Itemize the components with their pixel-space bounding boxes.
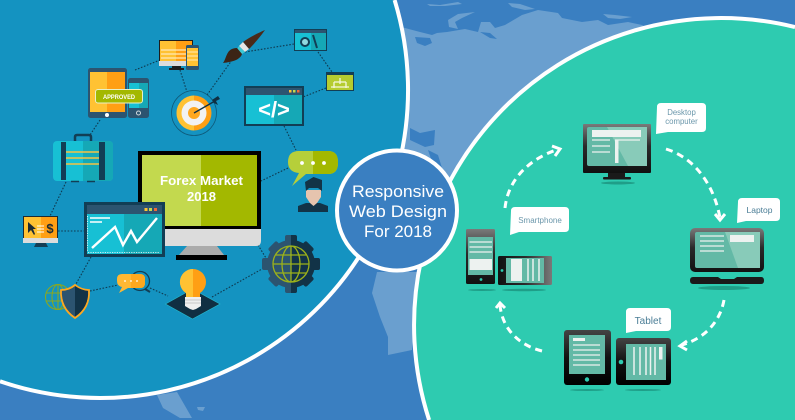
- icon: responsive screens: [159, 40, 199, 70]
- device: smartphones: [466, 229, 552, 291]
- monitor text: Forex Market: [160, 173, 244, 188]
- title badge: Web Design: [349, 203, 447, 221]
- arrow: desktop to laptop: [666, 149, 725, 220]
- icon: sitemap window: [326, 72, 354, 91]
- icon: paint brush: [223, 30, 265, 63]
- callout: laptop: [737, 198, 780, 223]
- icon: light bulb on diamond: [166, 269, 220, 319]
- callout: desktop computer: Desktop: [667, 108, 696, 117]
- icon: small exchange monitor: [23, 216, 58, 247]
- icon: target with arrow: [172, 90, 220, 136]
- icon: suitcase: [53, 135, 113, 182]
- icon: green speech bubble: [288, 151, 338, 186]
- icon: tools window: [294, 29, 327, 51]
- panel: right circle: [414, 18, 795, 420]
- callout: tablet: Tablet: [635, 316, 662, 327]
- dotted connectors: [50, 44, 332, 297]
- icon: person: [298, 177, 328, 212]
- callout: smartphone: [510, 207, 569, 235]
- icon: approved tablet and phone: [88, 68, 149, 118]
- icon: chat and magnifier: [117, 272, 150, 293]
- title badge: For 2018: [364, 223, 432, 241]
- callout: laptop: Laptop: [746, 205, 773, 215]
- device: desktop computer: [583, 124, 651, 184]
- device: tablets: [564, 330, 671, 391]
- title badge: [337, 150, 457, 270]
- icon: code window: [244, 86, 304, 126]
- callout: tablet: [626, 308, 671, 333]
- icon: large monitor: 2018: [187, 189, 216, 204]
- arrow: tablet to smartphone: [496, 303, 542, 351]
- icon: gear with globe: [262, 235, 320, 293]
- panel: left circle: [0, 0, 408, 398]
- icon: globe and shield: [46, 284, 89, 318]
- icon: small exchange monitor: $: [46, 221, 54, 236]
- callout: smartphone: Smartphone: [518, 216, 562, 225]
- title badge: Responsive: [352, 183, 444, 201]
- callout: desktop computer: [656, 103, 706, 134]
- icon: approved tablet and phone: APPROVED: [103, 94, 135, 101]
- icon: code window: </>: [258, 97, 290, 122]
- device: laptop: [690, 228, 764, 290]
- icon: chart window: [84, 202, 165, 257]
- arrow: smartphone to desktop: [505, 146, 560, 208]
- callout: desktop computer: computer: [665, 117, 698, 126]
- icon: large monitor: [138, 151, 261, 260]
- arrow: laptop to tablet: [680, 300, 724, 350]
